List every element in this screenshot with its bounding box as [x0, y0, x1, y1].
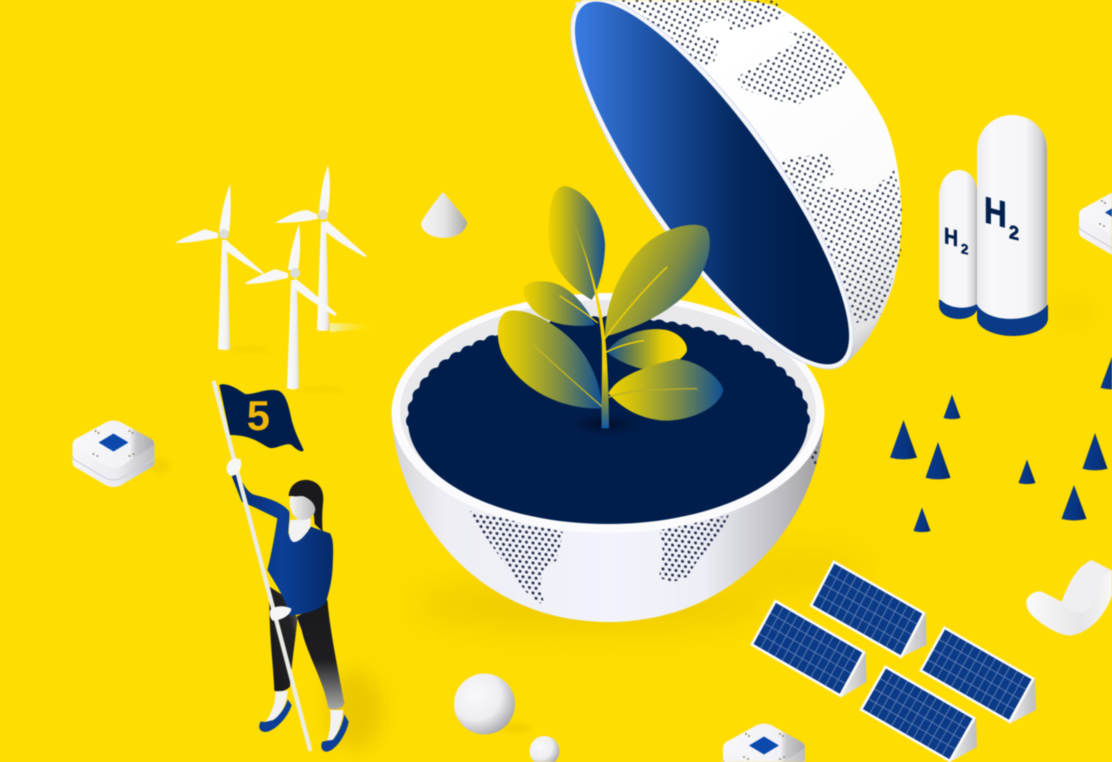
flag number: 5	[247, 392, 270, 439]
lower hand	[270, 606, 291, 621]
wind turbines	[176, 165, 378, 390]
cone	[926, 442, 950, 479]
soil scalloped edge	[414, 324, 802, 421]
bowl: lower half of globe	[392, 293, 824, 622]
cone	[1018, 460, 1036, 484]
ankles	[265, 691, 288, 722]
hydrogen tanks	[939, 115, 1048, 336]
curved white block	[1026, 560, 1112, 636]
soil	[408, 318, 808, 524]
leaf: middle right	[607, 329, 687, 369]
cone	[1062, 485, 1086, 520]
solar panel: right	[919, 626, 1036, 724]
open globe lid	[528, 0, 902, 403]
leaf: lower right	[608, 359, 723, 421]
leaf: upper left	[523, 281, 595, 326]
cone	[890, 420, 917, 459]
solar panel: top	[809, 560, 926, 659]
sphere: small	[530, 736, 560, 762]
solar panel: left	[750, 599, 866, 698]
legs	[269, 587, 297, 692]
modular box: bottom	[723, 724, 805, 762]
ground shadows	[150, 300, 1094, 750]
white cone	[421, 192, 467, 238]
solar panel: bottom	[859, 665, 977, 762]
turbine gleam	[330, 323, 378, 332]
flag	[219, 384, 304, 451]
cone	[914, 508, 930, 532]
lid rim	[528, 0, 896, 403]
bowl rim	[392, 293, 824, 533]
solar panels	[750, 560, 1036, 762]
leaf: lower left	[498, 310, 602, 408]
modular box: left	[72, 420, 154, 487]
stem	[568, 212, 609, 428]
small tank label: H	[944, 222, 958, 252]
sphere: large	[454, 674, 515, 734]
bowl inner wall	[400, 300, 816, 522]
turbine: back right	[275, 165, 367, 331]
pole	[214, 383, 310, 749]
lid inner surface	[535, 0, 889, 396]
cone	[1082, 433, 1108, 470]
turbine: front	[245, 224, 337, 390]
cone	[1100, 354, 1112, 389]
big tank	[977, 115, 1048, 336]
leaf veins	[533, 267, 697, 407]
small tank label: 2	[961, 240, 969, 258]
shoes	[259, 699, 292, 732]
cone	[944, 394, 960, 419]
stem shadow	[555, 409, 655, 439]
big tank label: 2	[1009, 221, 1019, 244]
neck	[289, 518, 311, 542]
turbine: left	[176, 184, 264, 350]
big tank label: H	[984, 189, 1007, 236]
plant	[498, 186, 723, 428]
bowl dot continents	[469, 447, 818, 607]
hair	[289, 480, 323, 531]
leaf: upper right	[605, 225, 710, 337]
big tank label	[984, 189, 1019, 244]
small tank label	[944, 222, 969, 258]
lid dome	[575, 0, 901, 363]
small tank	[939, 170, 978, 319]
modular box: right	[1079, 190, 1112, 257]
face	[290, 496, 315, 520]
upper hand	[227, 458, 241, 476]
sweater	[232, 474, 333, 616]
person holding flag	[214, 383, 349, 752]
navy cones	[890, 354, 1112, 532]
bowl body	[392, 415, 824, 622]
lid dot continents	[618, 0, 902, 323]
leaf: top	[548, 186, 605, 300]
